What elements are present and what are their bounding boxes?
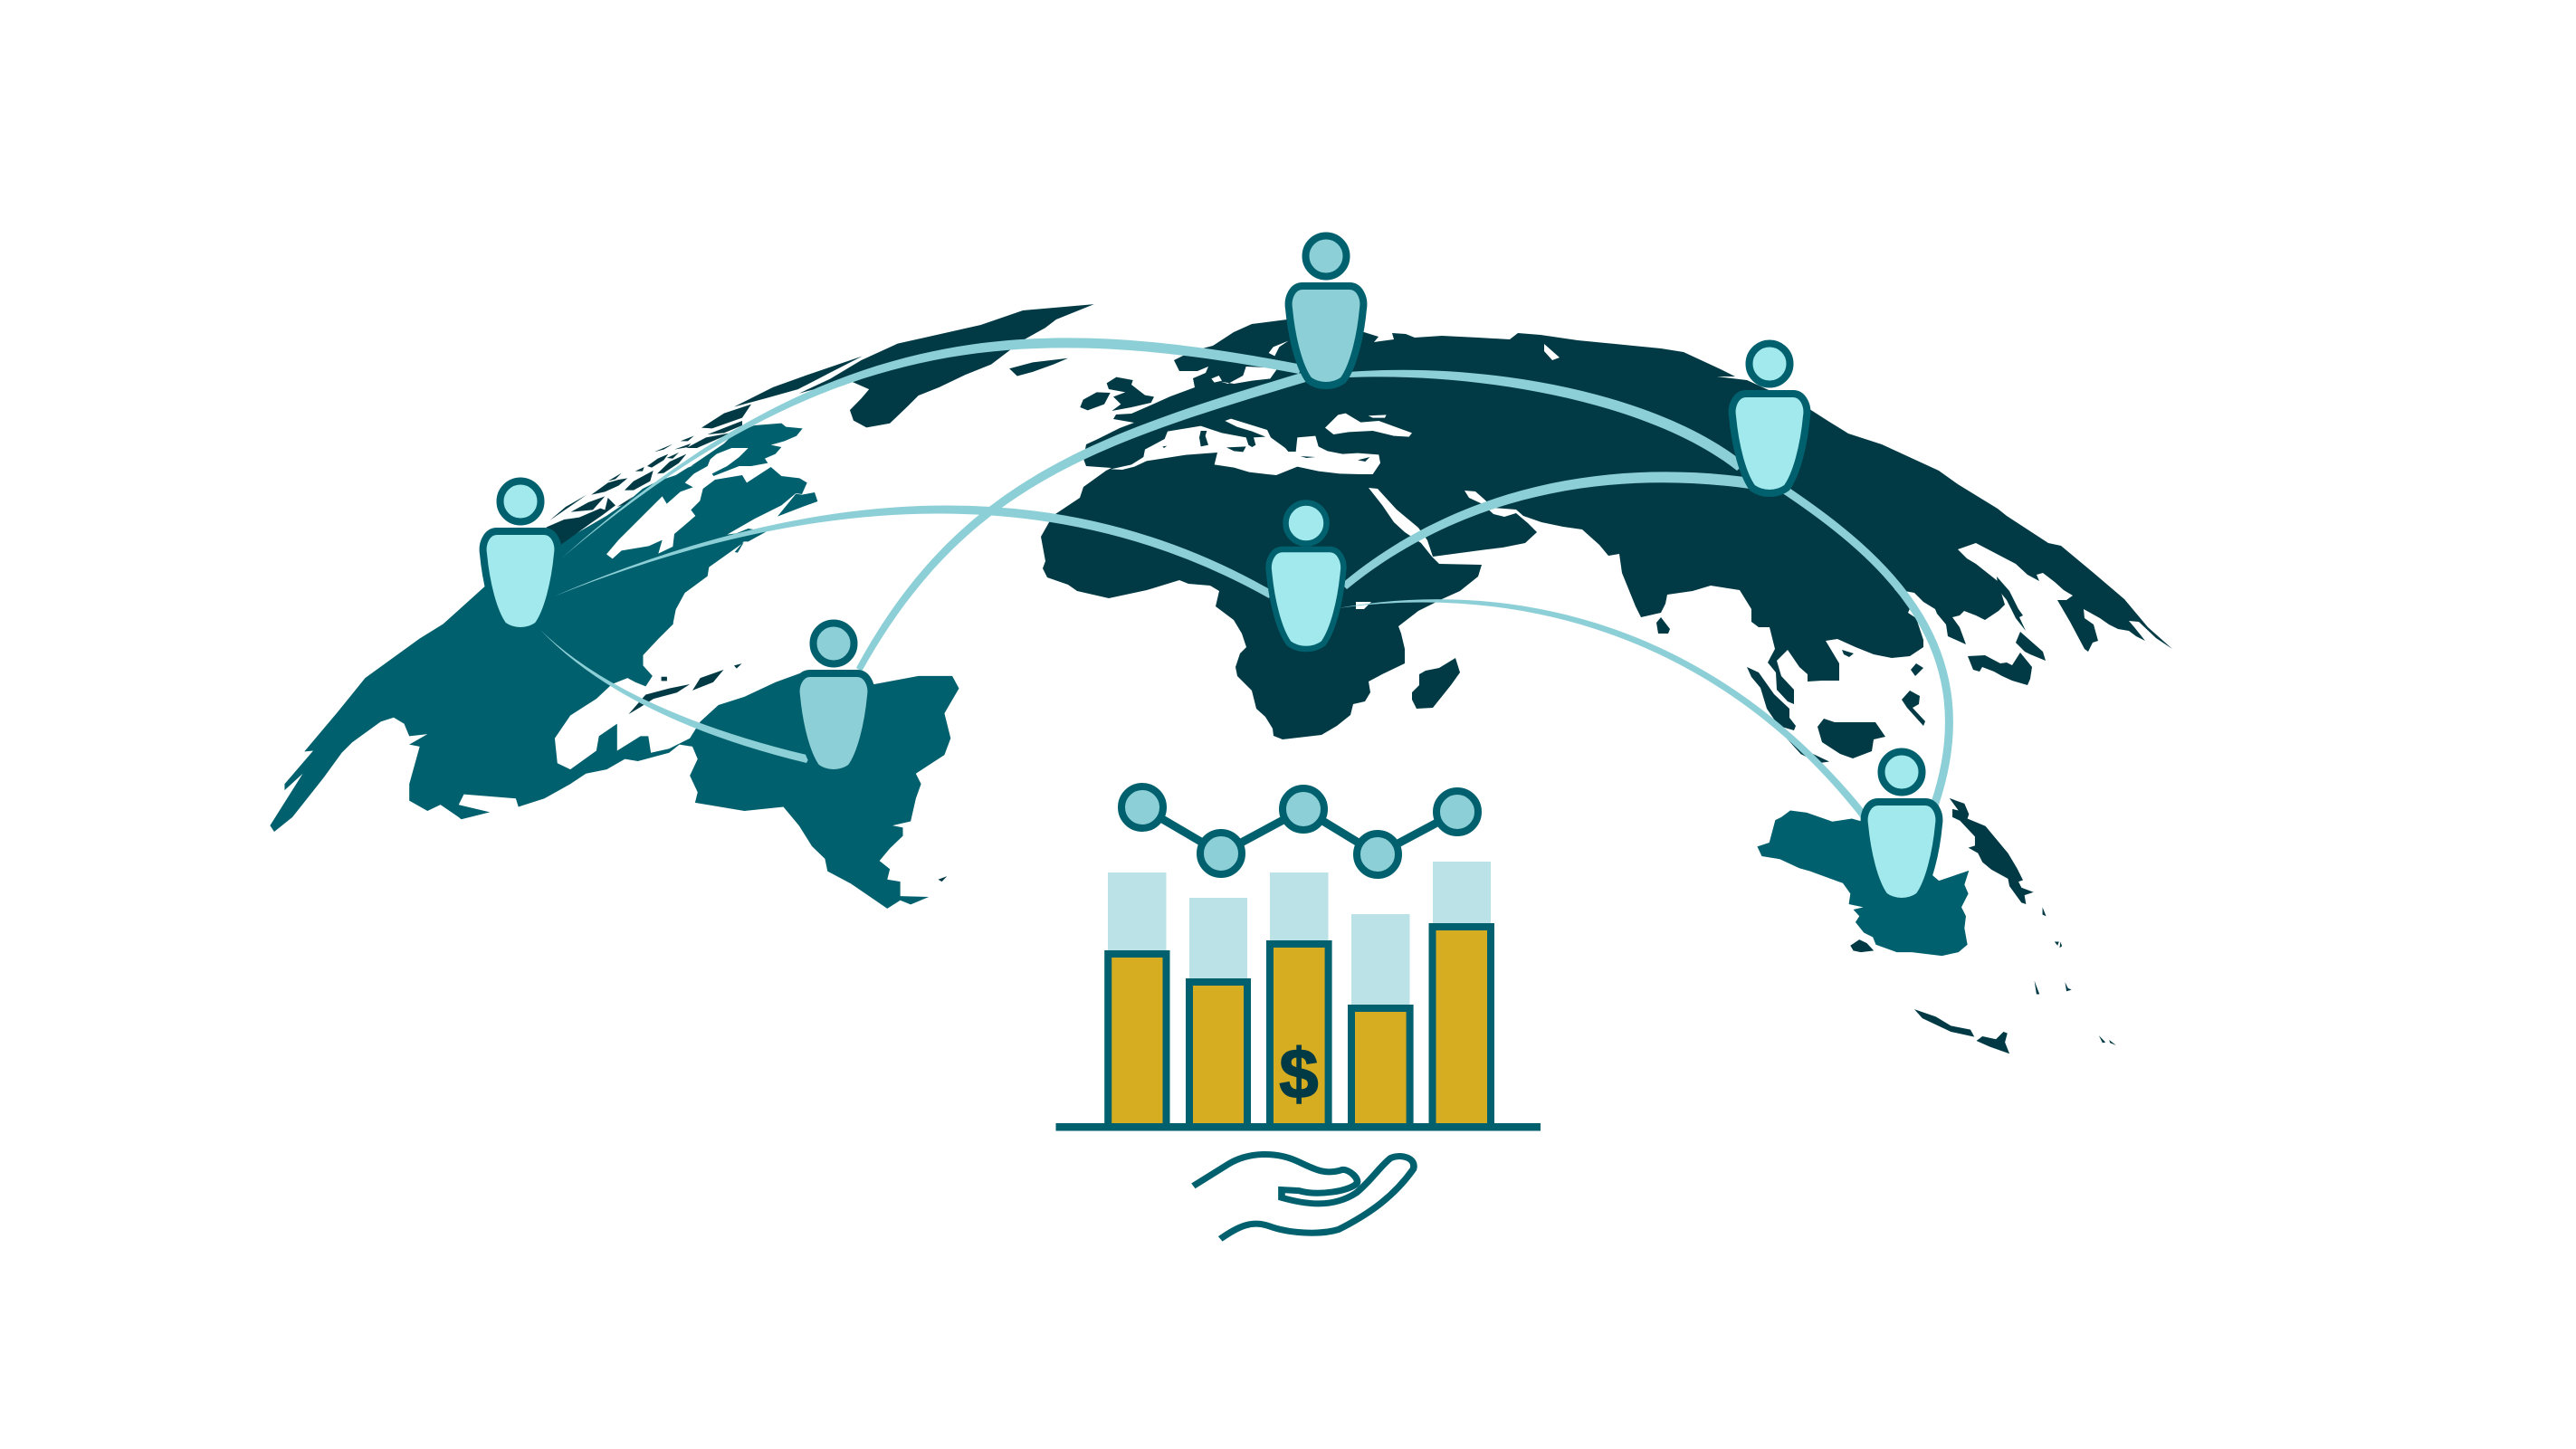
continent: Eurasia and Africa [1041, 319, 2172, 739]
arc: South America to Europe [856, 371, 1309, 672]
sea: Baltic and Bothnia [1211, 341, 1288, 384]
island: Newfoundland [778, 492, 817, 517]
sea: Mediterranean [1111, 419, 1380, 475]
person: South America [797, 623, 871, 773]
islands: Britain and Ireland [1080, 377, 1154, 411]
islands: Mediterranean [1162, 431, 1369, 462]
arc: North America to South America [540, 630, 810, 763]
people [483, 235, 1939, 901]
icon: open hand [1193, 1154, 1414, 1239]
person: North America [483, 481, 558, 631]
person: Africa [1269, 503, 1343, 649]
connection arcs [540, 338, 1949, 818]
arc: Asia to Australia [1783, 489, 1949, 806]
inland water: Ob gulf and Lake Victoria [1356, 344, 1560, 609]
continent: Australia [1757, 811, 1969, 956]
trend line with dots [1121, 786, 1478, 875]
foreground bars [1108, 927, 1491, 1127]
sea: Black Sea and Azov [1325, 414, 1412, 437]
baseline [1055, 1123, 1541, 1131]
person: Asia [1732, 344, 1807, 493]
arc: Africa to Asia [1341, 472, 1751, 589]
island: Greenland [799, 304, 1094, 427]
islands: Madagascar [1412, 658, 1460, 709]
investment chart [1055, 786, 1541, 1239]
arc: North America to Africa [554, 505, 1273, 598]
islands: Tasmania, New Guinea, New Zealand and Pacific [1786, 738, 2116, 1053]
person: Europe [1289, 235, 1363, 386]
dollar sign: $ [1279, 1034, 1319, 1113]
arc: Europe to Asia [1349, 370, 1745, 471]
continent: central and South America with lower North America [269, 535, 959, 909]
islands: Japan and Sakhalin [1968, 577, 2046, 685]
map: Australia and Oceania [1757, 738, 2116, 1053]
arc: North America to Europe [560, 338, 1302, 559]
map: Americas [269, 304, 1094, 909]
seas: Mediterranean, Black Sea and Baltic [1080, 341, 1412, 475]
island: Iceland [1009, 358, 1068, 376]
island: Baffin [691, 424, 803, 476]
islands: South and Southeast Asia [1656, 617, 1925, 758]
arc: Africa to Australia [1338, 599, 1866, 818]
map: northern North America [543, 405, 817, 624]
background bars [1108, 862, 1491, 1010]
person: Australia [1865, 751, 1939, 901]
islands: Canadian Arctic archipelago [546, 405, 751, 545]
islands: Caribbean and Falklands [628, 663, 947, 882]
world map [269, 304, 2172, 1053]
island: Ellesmere [734, 356, 863, 406]
landmass: Canada with Hudson Bay [543, 459, 807, 624]
